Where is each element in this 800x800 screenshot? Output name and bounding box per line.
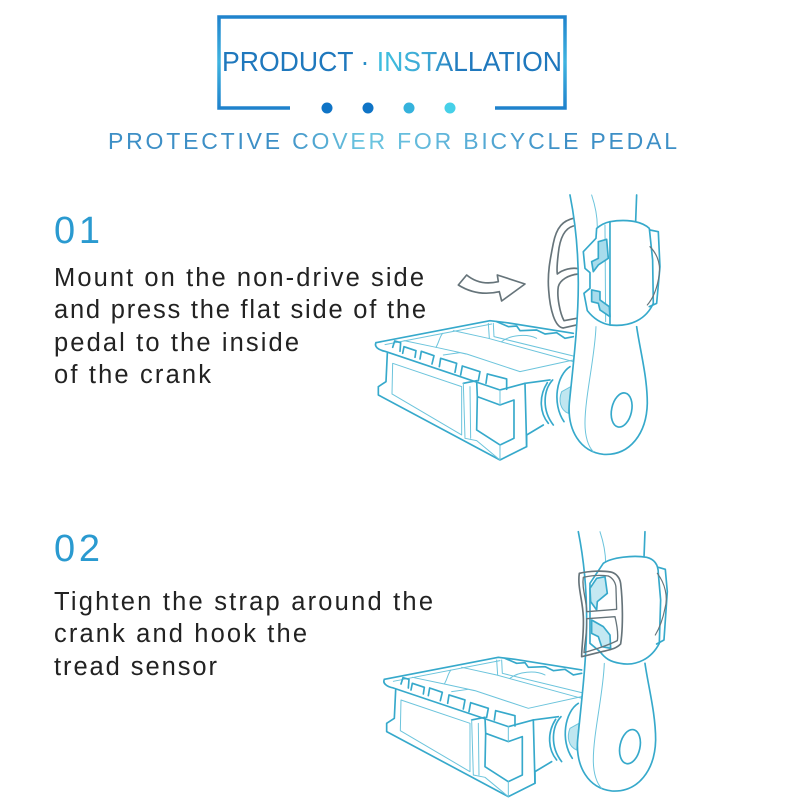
icon: curved arrow	[458, 275, 525, 301]
decorative dots row	[322, 102, 456, 114]
title: PRODUCT · INSTALLATION	[222, 46, 562, 77]
strap over crank	[579, 571, 622, 657]
step 1 text: Mount on the non-drive side	[54, 264, 424, 292]
subtitle: PROTECTIVE COVER FOR BICYCLE PEDAL	[108, 128, 677, 154]
step 1 text: and press the flat side of the	[54, 296, 426, 324]
step 2 number: 02	[54, 528, 100, 570]
step 1 text: pedal to the inside	[54, 329, 299, 357]
strap behind crank	[548, 218, 578, 328]
sensor	[579, 556, 667, 664]
illustration: pedal with strap hooked around crank	[384, 532, 667, 797]
pedal and crank	[384, 532, 656, 797]
step 1 text	[54, 264, 426, 389]
step 2 text	[54, 588, 433, 681]
pedal and crank	[376, 195, 647, 460]
step 2 text: Tighten the strap around the	[54, 588, 433, 616]
step 1 text: of the crank	[54, 361, 211, 389]
step 1 number: 01	[54, 210, 100, 252]
step 2 text: crank and hook the	[54, 620, 307, 648]
illustration: pedal with strap on inner side of crank	[376, 195, 660, 460]
sensor	[583, 220, 660, 325]
step 2 text: tread sensor	[54, 653, 218, 681]
header frame	[219, 17, 565, 108]
